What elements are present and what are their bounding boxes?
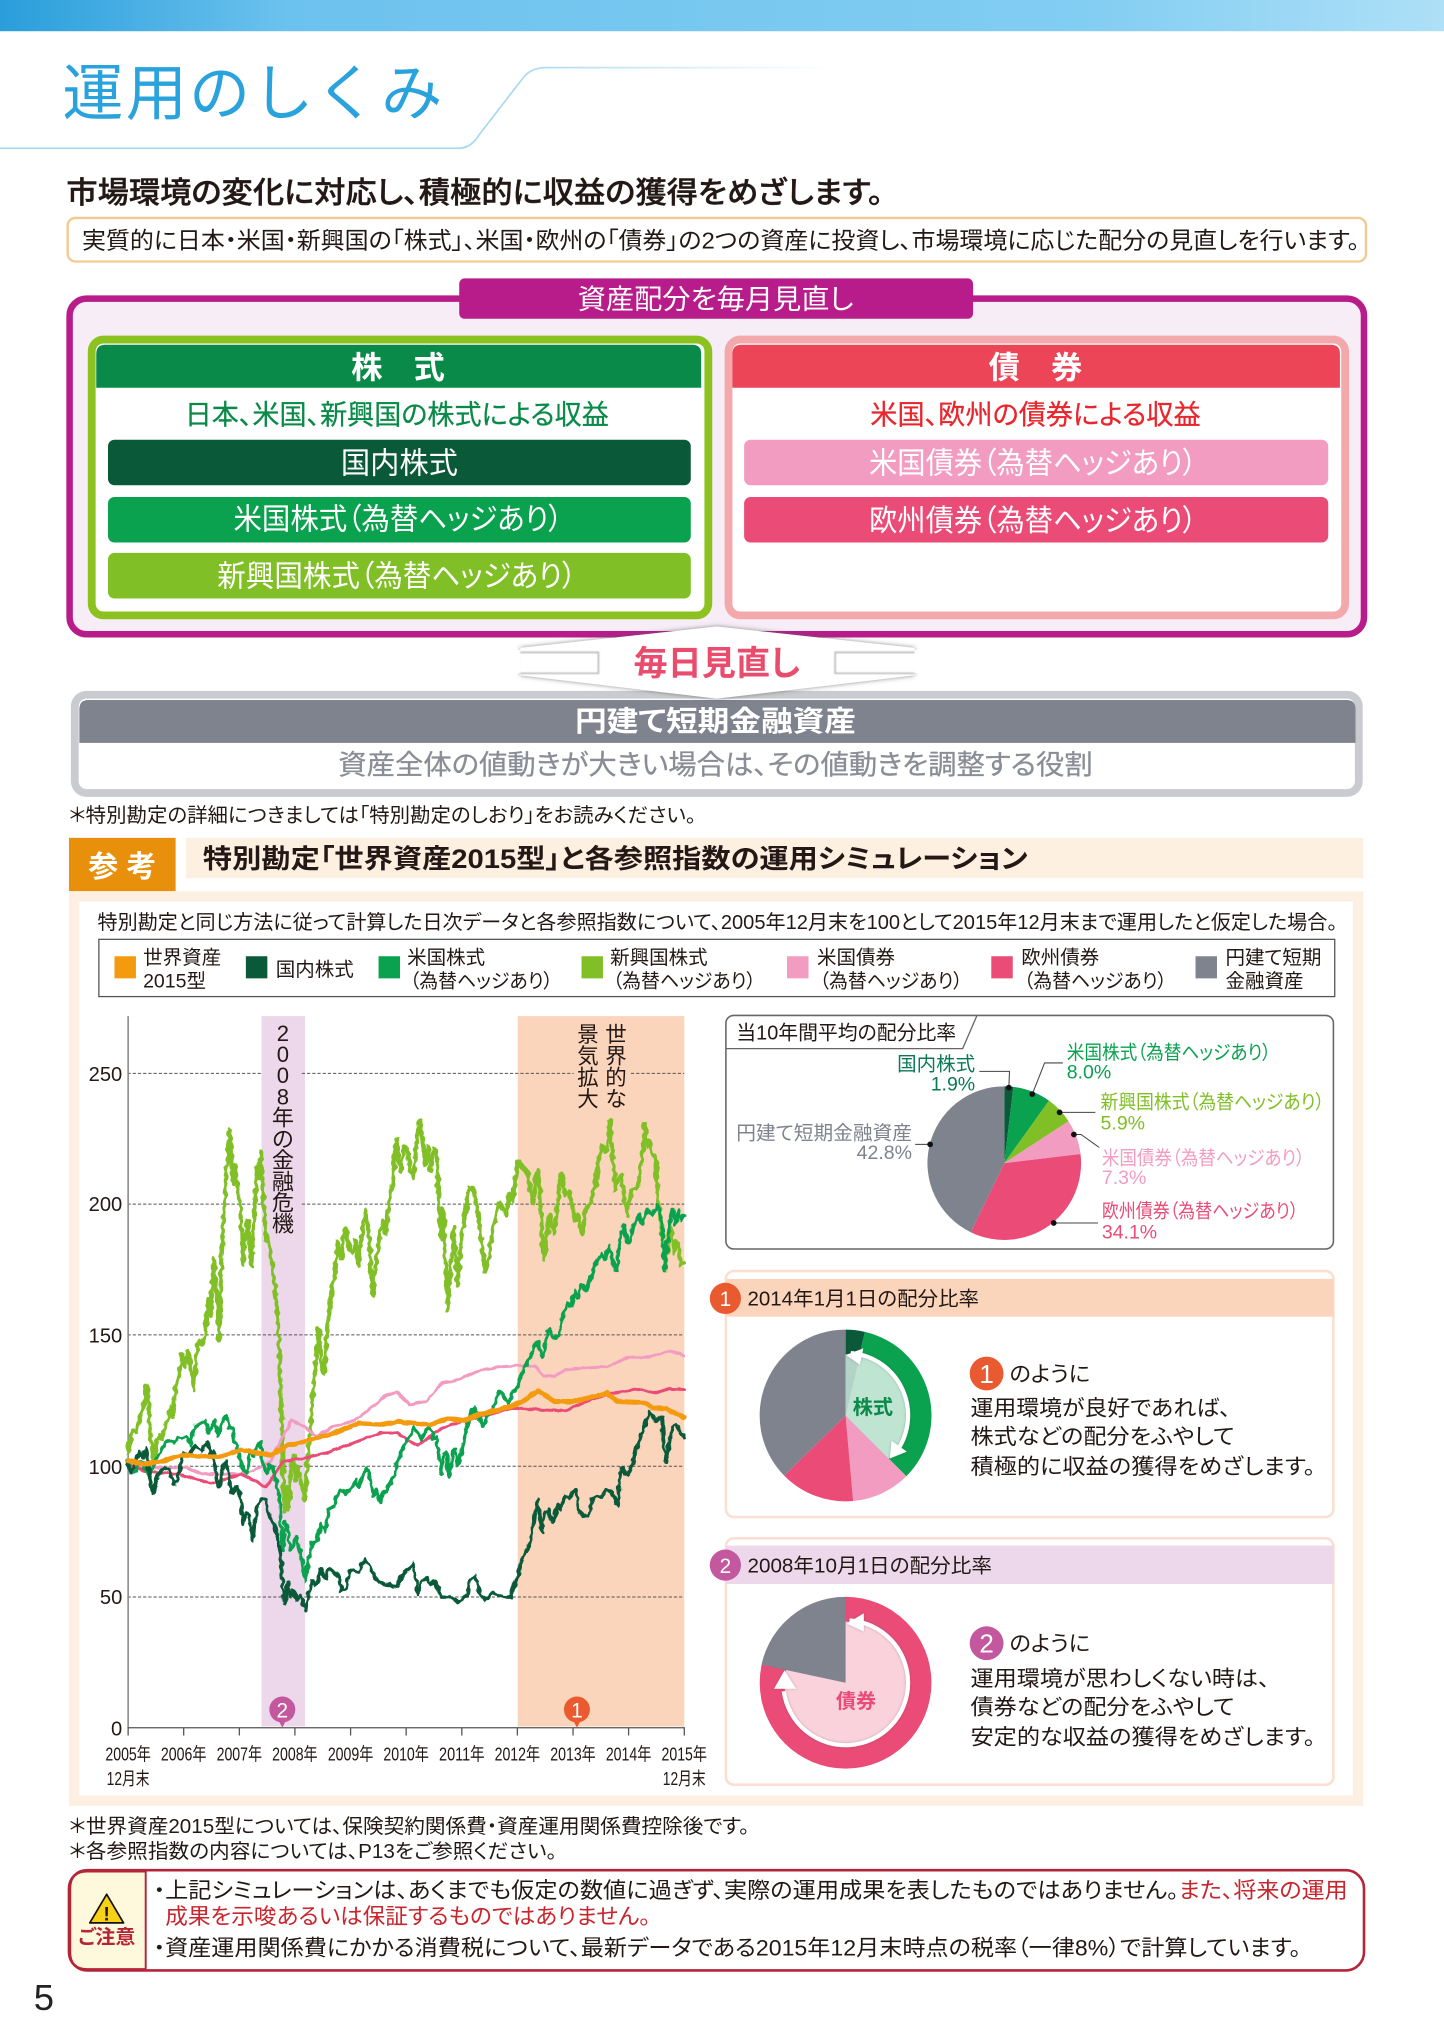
footnotes: ＊各参照指数の内容については、P13をご参照ください。 (69, 1840, 557, 1863)
legend (99, 939, 1335, 997)
marker 1: 1 (571, 1699, 583, 1722)
panel: short-term yen assets (75, 695, 1359, 793)
x axis (105, 1728, 707, 1789)
pie chart: equity-heavy allocation: 株式 (853, 1396, 893, 1419)
heading: 市場環境の変化に対応し、積極的に収益の獲得をめざします。 (66, 176, 883, 210)
x axis: 2008年 (272, 1744, 318, 1764)
legend: （為替ヘッジあり） (613, 970, 756, 992)
pie chart: bond-heavy allocation (760, 1597, 931, 1769)
legend: 国内株式 (276, 959, 354, 981)
marker 1 (564, 1697, 590, 1728)
panel: equities (92, 340, 708, 615)
x axis: 2006年 (161, 1744, 206, 1764)
callout text: 運用環境が思わしくない時は、 (970, 1667, 1270, 1691)
y axis: 0 (111, 1719, 122, 1741)
legend: 新興国株式 (610, 947, 708, 969)
legend: （為替ヘッジあり） (820, 970, 963, 992)
panel: allocation on 2014-01-01: 2014年1月1日の配分比率 (747, 1288, 979, 1311)
tab: monthly review (459, 278, 973, 319)
callout text: 2 (979, 1628, 994, 1658)
band: 2008 financial crisis: 2008年の金融危機 (272, 1021, 294, 1237)
caution box: ・上記シミュレーションは、あくまでも仮定の数値に過ぎず、実際の運用成果を表したものではありません。 (154, 1878, 1179, 1903)
summary box: 実質的に日本・米国・新興国の「株式」、米国・欧州の「債券」の2つの資産に投資し、市場環境に応じた配分の見直しを行います。 (82, 227, 1359, 253)
y axis: 200 (89, 1194, 122, 1216)
panel: equities: 株 式 (351, 351, 445, 386)
callout text: 1 (979, 1359, 994, 1389)
x axis: 2005年 (105, 1744, 151, 1764)
legend: （為替ヘッジあり） (410, 970, 553, 992)
band: 2008 financial crisis (261, 1016, 305, 1726)
bar: US bonds (744, 440, 1328, 485)
panel: simulation (69, 891, 1363, 1806)
panel: 10-year average allocation (726, 1015, 1333, 1249)
panel: allocation on 2008-10-01: 2 (720, 1555, 731, 1578)
icon: warning triangle (90, 1894, 124, 1925)
bar: domestic equities: 国内株式 (341, 448, 458, 481)
marker 2: 2 (277, 1699, 288, 1722)
panel: monthly allocation review (70, 278, 1364, 634)
label: US bonds share: 米国債券（為替ヘッジあり） (1102, 1147, 1305, 1169)
label: short-term assets share: 円建て短期金融資産 (736, 1123, 912, 1145)
page number: 5 (34, 1977, 54, 2018)
label: emerging equities share (1057, 1091, 1324, 1134)
legend: （為替ヘッジあり） (1024, 970, 1167, 992)
callout text: 株式などの配分をふやして (970, 1425, 1235, 1449)
arrow: daily review (494, 626, 941, 699)
bar: European bonds: 欧州債券（為替ヘッジあり） (869, 505, 1197, 538)
series lines (128, 1120, 684, 1610)
label: emerging equities share: 5.9% (1101, 1112, 1145, 1134)
panel: allocation on 2008-10-01 (710, 1538, 1333, 1785)
footnotes: ＊世界資産2015型については、保険契約関係費・資産運用関係費控除後です。 (69, 1815, 749, 1838)
y axis: 250 (89, 1064, 122, 1086)
callout text: 債券などの配分をふやして (970, 1696, 1235, 1720)
callout text: 安定的な収益の獲得をめざします。 (970, 1725, 1315, 1750)
footnotes (69, 1815, 749, 1863)
label: European bonds share: 欧州債券（為替ヘッジあり） (1102, 1201, 1298, 1223)
top banner (0, 0, 1444, 31)
x axis: 2014年 (606, 1744, 651, 1764)
label: emerging equities share: 新興国株式（為替ヘッジあり） (1101, 1091, 1324, 1113)
callout text: 運用環境が良好であれば、 (970, 1397, 1231, 1421)
panel: short-term yen assets: 資産全体の値動きが大きい場合は、その値動きを調整する役割 (338, 749, 1093, 780)
section heading: reference: 特別勘定「世界資産2015型」と各参照指数の運用シミュレーション (203, 844, 1028, 874)
legend: 円建て短期 (1225, 947, 1321, 969)
line: US bonds (128, 1351, 684, 1474)
tab: monthly review: 資産配分を毎月見直し (578, 283, 853, 314)
bar: European bonds (744, 497, 1328, 543)
marker 2 (269, 1697, 295, 1728)
caution box: 成果を示唆あるいは保証するものではありません。 (165, 1904, 650, 1929)
panel: allocation on 2008-10-01: 2008年10月1日の配分比率 (747, 1554, 992, 1577)
note: special account: ＊特別勘定の詳細につきましては「特別勘定のしおり」をお読みください。 (69, 804, 696, 827)
arrow: daily review: 毎日見直し (634, 645, 800, 683)
panel: 10-year average allocation: 当10年間平均の配分比率 (736, 1022, 956, 1045)
panel: bonds: 債 券 (989, 351, 1082, 386)
callout text: 積極的に収益の獲得をめざします。 (970, 1454, 1315, 1479)
x axis: 2009年 (328, 1744, 373, 1764)
line: emerging equities (128, 1120, 684, 1512)
y axis: 100 (89, 1457, 122, 1479)
x axis: 2015年 (662, 1744, 707, 1764)
line chart (89, 1016, 707, 1789)
label: US equities share: 米国株式（為替ヘッジあり） (1067, 1042, 1271, 1064)
band: global expansion: 世界的な (605, 1023, 627, 1112)
legend: 世界資産 (143, 947, 221, 969)
callout text: のように (1009, 1363, 1090, 1387)
bar: US equities (108, 497, 691, 543)
label: domestic equities share: 1.9% (931, 1073, 975, 1095)
line: domestic equities (128, 1411, 684, 1610)
x axis: 2007年 (217, 1744, 262, 1764)
caution box (69, 1870, 1364, 1970)
legend: 2015型 (143, 970, 206, 992)
caution box: ・資産運用関係費にかかる消費税について、最新データである2015年12月末時点の税率（一律8%）で計算しています。 (154, 1935, 1301, 1960)
label: European bonds share (1051, 1201, 1298, 1244)
legend: 欧州債券 (1021, 947, 1099, 969)
icon: warning triangle: ! (103, 1903, 110, 1925)
label: US equities share: 8.0% (1067, 1062, 1111, 1084)
panel: short-term yen assets: 円建て短期金融資産 (575, 706, 856, 738)
y axis: 50 (100, 1587, 122, 1609)
callout text: のように (1009, 1632, 1090, 1656)
band: global expansion (518, 1016, 684, 1726)
x axis: 2010年 (383, 1744, 429, 1764)
label: short-term assets share: 42.8% (857, 1142, 912, 1164)
label: US equities share (1029, 1042, 1271, 1097)
intro text: 特別勘定と同じ方法に従って計算した日次データと各参照指数について、2005年12月末を100として2015年12月末まで運用したと仮定した場合。 (98, 911, 1337, 934)
bar: US bonds: 米国債券（為替ヘッジあり） (869, 448, 1197, 481)
bar: emerging equities: 新興国株式（為替ヘッジあり） (217, 561, 576, 594)
title (0, 59, 833, 148)
caution box: また、将来の運用 (1179, 1878, 1348, 1903)
panel: bonds: 米国、欧州の債券による収益 (870, 399, 1201, 430)
band: global expansion: 景気拡大 (577, 1023, 599, 1112)
legend: 米国株式 (407, 947, 485, 969)
y axis (89, 1016, 128, 1741)
label: short-term assets share (736, 1123, 933, 1164)
x axis: 2011年 (439, 1744, 485, 1764)
pie chart: bond-heavy allocation: 債券 (836, 1690, 876, 1713)
legend: 金融資産 (1225, 970, 1303, 992)
callout text (970, 1357, 1315, 1479)
panel: allocation on 2014-01-01: 1 (720, 1288, 731, 1311)
summary box (68, 218, 1366, 262)
pie chart: equity-heavy allocation (760, 1330, 931, 1501)
panel: equities: 日本、米国、新興国の株式による収益 (185, 399, 609, 430)
bar: emerging equities (108, 553, 691, 598)
panel: bonds (729, 340, 1345, 615)
label: domestic equities share (897, 1054, 1012, 1095)
label: US bonds share (1071, 1132, 1305, 1189)
section heading: reference (69, 838, 1363, 891)
callout text (970, 1626, 1315, 1750)
title: 運用のしくみ (62, 59, 442, 127)
bar: domestic equities (108, 440, 691, 485)
line: US equities (128, 1206, 684, 1581)
line: world asset 2015 (128, 1391, 684, 1465)
caution box: ご注意 (78, 1926, 135, 1949)
x axis: 12月末 (107, 1769, 150, 1789)
panel: allocation on 2014-01-01 (710, 1271, 1333, 1517)
pie chart: average allocation (927, 1086, 1081, 1240)
x axis: 2013年 (550, 1744, 596, 1764)
legend: 米国債券 (817, 947, 895, 969)
line: European bonds (128, 1389, 684, 1487)
label: domestic equities share: 国内株式 (897, 1054, 975, 1076)
section heading: reference: 参 考 (88, 851, 156, 884)
x axis: 12月末 (663, 1769, 706, 1789)
label: US bonds share: 7.3% (1102, 1167, 1146, 1189)
label: European bonds share: 34.1% (1102, 1222, 1157, 1244)
y axis: 150 (89, 1326, 122, 1348)
x axis: 2012年 (495, 1744, 540, 1764)
bar: US equities: 米国株式（為替ヘッジあり） (234, 504, 563, 537)
